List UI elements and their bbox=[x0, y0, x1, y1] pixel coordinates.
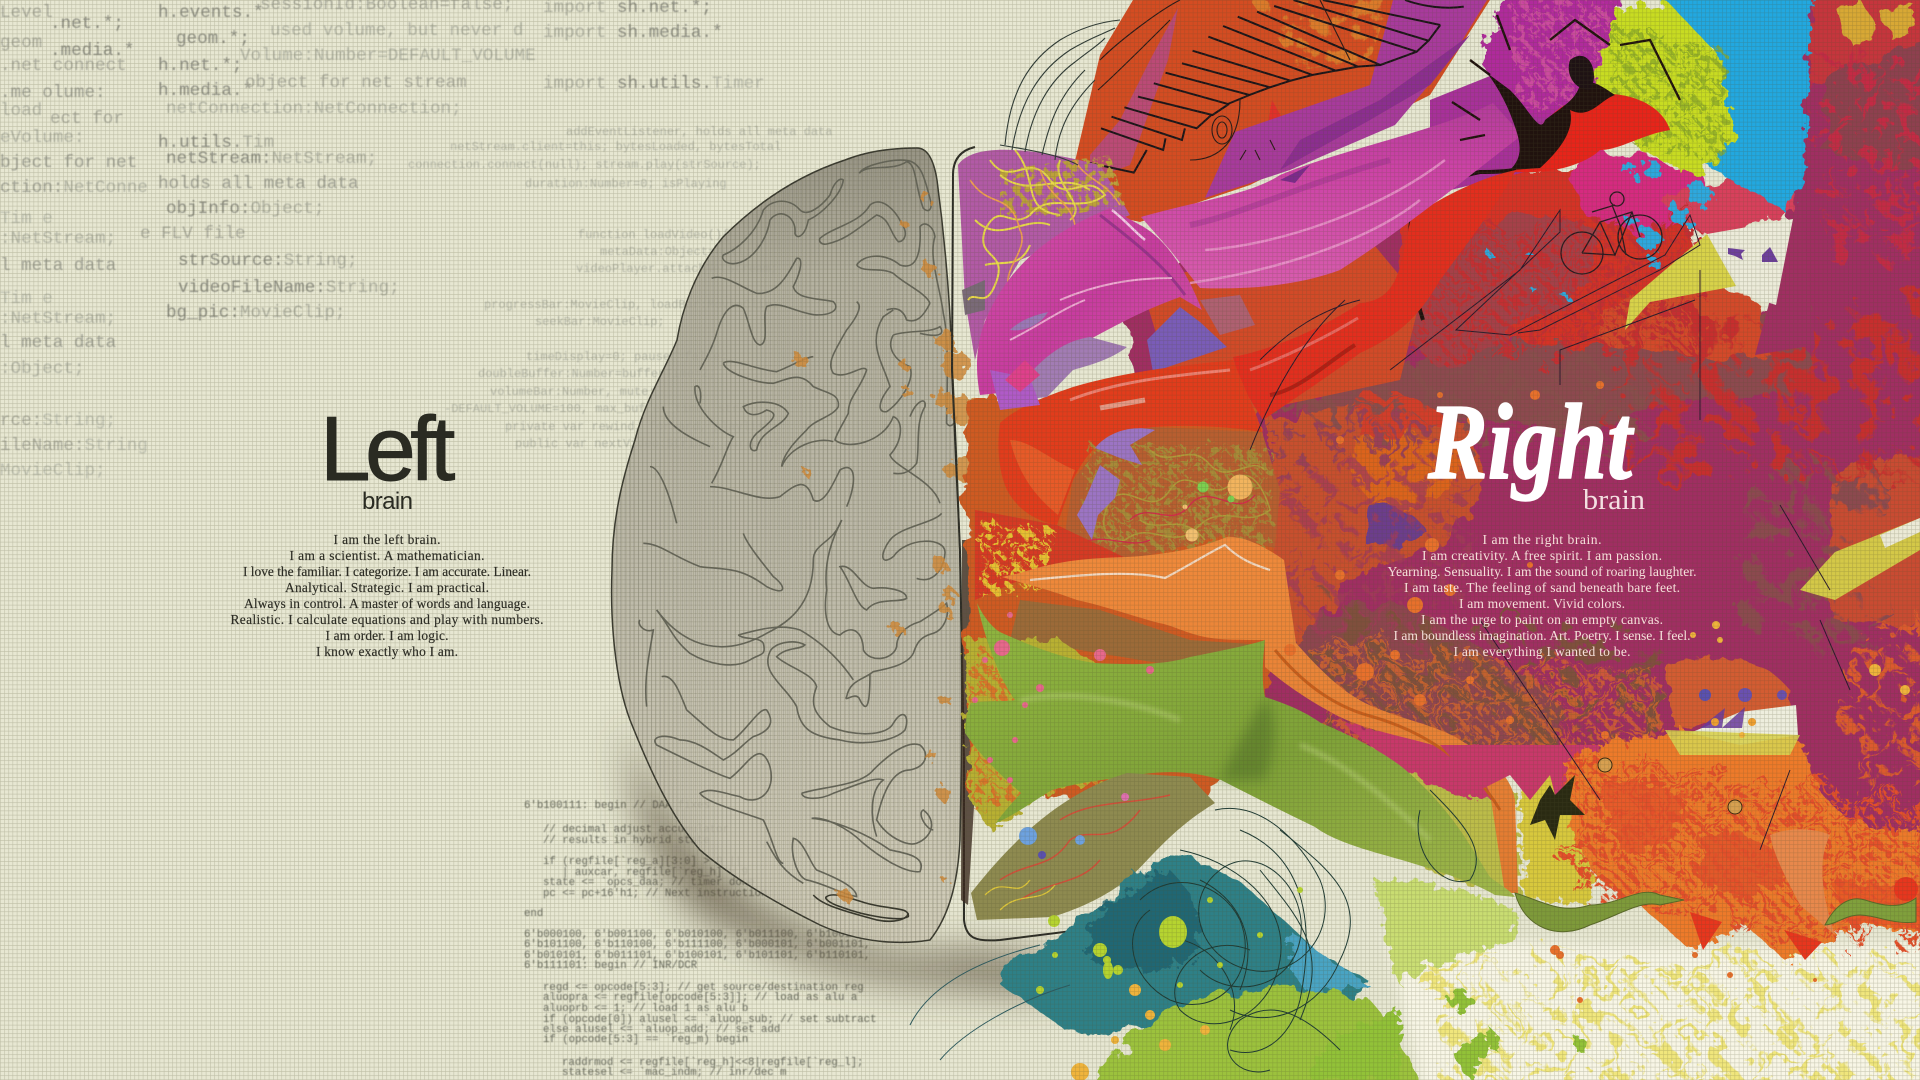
teal paint splash bbox=[996, 853, 1371, 1032]
faint code behind the brain: function loadVideo(){ bbox=[578, 228, 729, 242]
dark hemisphere edge band bbox=[961, 540, 975, 905]
faint code behind the brain: volumeBar:Number, mute; bbox=[490, 385, 656, 399]
yellow strip beside orange stream bbox=[1520, 770, 1600, 905]
yellow spatter lower right bbox=[1430, 950, 1920, 1080]
lime green bottom splash bbox=[1080, 989, 1425, 1080]
faint code behind the brain: videoPlayer.attachNetStream; bbox=[576, 262, 778, 276]
small paint ribbon in orange bbox=[1770, 829, 1835, 935]
orange paint spatter on brain edge bbox=[793, 192, 981, 901]
fan red cone bbox=[1260, 100, 1300, 170]
splatter: red on the crimson right bbox=[1620, 300, 1920, 480]
teal-grey fleck behind ribbon bbox=[1200, 295, 1255, 335]
computer code background: top left: bject for net bbox=[0, 153, 137, 173]
computer code background: top left: h.utils.Tim bbox=[158, 133, 274, 153]
text block: left brain description: Analytical. Strategic. I am practical. bbox=[285, 580, 489, 595]
right brain hemisphere outline bbox=[952, 147, 1080, 940]
text block: right brain description: I am movement. Vivid colors. bbox=[1459, 596, 1625, 611]
computer code background: top left: .me olume: bbox=[0, 83, 106, 103]
computer code background: top left: l meta data bbox=[0, 333, 116, 353]
lavender petals bbox=[1077, 428, 1155, 540]
computer code background: top left: e FLV file bbox=[140, 224, 246, 244]
pink red stripe beside white triangle bbox=[1660, 175, 1800, 238]
computer code background: top left: ction:NetConne bbox=[0, 178, 148, 198]
pink left ribbon bulge bbox=[977, 208, 1202, 395]
tree roots black drawing bbox=[1452, 15, 1680, 172]
olive-orange tangle bbox=[1060, 427, 1280, 565]
computer code background: top left: strSource:String; bbox=[178, 251, 358, 271]
heading: Right brain: Right bbox=[1427, 383, 1634, 502]
fan purple band bbox=[1205, 0, 1487, 198]
text block: left brain description: Always in control. A master of words and language. bbox=[244, 596, 530, 611]
paint splatter dots: yellow-orange bbox=[1071, 621, 1910, 1080]
green leaf splashes lower bbox=[1310, 989, 1587, 1080]
computer code background: top left: :NetStream; bbox=[0, 309, 116, 329]
brown band bbox=[1290, 300, 1810, 430]
faint code behind the brain: public var nextVideo:String, currentFrame bbox=[515, 437, 810, 451]
computer code background: top left: :NetStream; bbox=[0, 229, 116, 249]
left brain hemisphere bbox=[612, 148, 962, 942]
yellow strip and dot row lower right bbox=[1665, 688, 1800, 755]
text block: right brain description: I am the urge to paint on an empty canvas. bbox=[1421, 612, 1663, 627]
paint splatter dots: lime and yellow bbox=[1036, 887, 1303, 994]
blue paint splash bbox=[1655, 0, 1812, 208]
splatter: crimson on left orange bbox=[1270, 420, 1470, 640]
splatter: brown around title bbox=[1270, 350, 1640, 470]
brain folds: upper lobe bbox=[650, 160, 957, 523]
computer code background: top left: object for net stream bbox=[245, 73, 467, 93]
computer code background: bottom: if (opcode[5:3] == `reg_m) begin bbox=[543, 1033, 748, 1046]
red-yellow tangle left bbox=[975, 510, 1130, 600]
text block: left brain description: I know exactly who I am. bbox=[316, 644, 458, 659]
text block: right brain description: I am everything I wanted to be. bbox=[1454, 644, 1630, 659]
computer code background: top left: eVolume: bbox=[0, 128, 84, 148]
paint splatter dots: orange and red bbox=[1284, 381, 1843, 1003]
white canvas triangle with purple marks bbox=[1707, 219, 1793, 305]
paint splatter dots: pink and green on hemisphere edge bbox=[972, 612, 1154, 783]
computer code background: top left: l meta data bbox=[0, 256, 116, 276]
computer code background: bottom: end bbox=[524, 908, 543, 920]
splatter: orange lower center bbox=[1320, 640, 1660, 770]
computer code background: top left: geom bbox=[0, 33, 42, 53]
computer code background: top left: objInfo:Object; bbox=[166, 199, 324, 219]
sketch lines across red zone bbox=[1250, 210, 1850, 850]
text block: left brain description: Realistic. I calculate equations and play with numbers. bbox=[230, 612, 544, 627]
text block: right brain description: I am boundless imagination. Art. Poetry. I sense. I feel. bbox=[1394, 628, 1690, 643]
computer code background: top left: :Object; bbox=[0, 359, 84, 379]
top right red corner bbox=[1805, 0, 1920, 90]
right orange block bbox=[1825, 458, 1920, 623]
olive wave left bbox=[1515, 892, 1684, 932]
top right brown patch bbox=[1825, 30, 1920, 167]
pink main ribbon bbox=[1141, 103, 1522, 288]
computer code background: top left: h.media.* bbox=[158, 81, 253, 101]
computer code background: top left: geom.*; bbox=[176, 29, 250, 49]
red-orange central swirl bbox=[998, 360, 1262, 525]
computer code background: top left: h.events.* bbox=[158, 3, 264, 23]
dark sketch scribbles near teal bbox=[910, 790, 1476, 1072]
yellow-green splash bbox=[1587, 3, 1736, 177]
faint code behind the brain: private var rewind, forward, playlist bbox=[505, 420, 771, 434]
orange speckle on green base bbox=[970, 650, 1125, 810]
fan sketch lines and eye bbox=[1098, 0, 1350, 260]
green paint blob bbox=[965, 603, 1515, 897]
faint code behind the brain: progressBar:MovieClip, loadBar:MovieClip; bbox=[484, 298, 779, 312]
lower middle brown crimson bbox=[1290, 604, 1570, 754]
hemisphere top tangle bbox=[958, 150, 1130, 360]
splatter: red on far right top bbox=[1810, 60, 1920, 260]
red-orange behind ribbons bbox=[1140, 240, 1420, 410]
computer code background: bottom: 6'b111101: begin // INR/DCR bbox=[524, 960, 698, 972]
computer code background: bottom: // decimal adjust accumulator bbox=[543, 824, 729, 836]
computer code background: bottom bbox=[524, 800, 877, 1079]
computer code background: top left: load bbox=[0, 101, 42, 121]
little wheels on orange bbox=[1598, 758, 1742, 814]
computer code background: top left: import sh.utils.Timer bbox=[543, 74, 765, 94]
text block: right brain description: I am creativity. A free spirit. I am passion. bbox=[1422, 548, 1662, 563]
computer code background: bottom: 6'b010101, 6'b011101, 6'b100101, 6'b101101, 6'b110101, bbox=[524, 950, 870, 962]
right side yellow stripe bbox=[1800, 518, 1920, 600]
computer code background: bottom: // results in hybrid state bbox=[543, 835, 710, 847]
splatter: red center zone bbox=[1420, 210, 1700, 360]
upper yellow triangle bbox=[1625, 234, 1736, 330]
faint code behind the brain: -DEFAULT_VOLUME=100, max_buffer_time, stream bbox=[444, 402, 761, 416]
pink speckle on magenta bbox=[1510, 0, 1615, 110]
computer code background: bottom: 6'b101100, 6'b110100, 6'b111100, 6'b000101, 6'b001101, bbox=[524, 939, 870, 951]
heading: Left brain: brain bbox=[362, 488, 412, 515]
crimson drips above the yellow bbox=[1440, 745, 1600, 820]
crimson mass bbox=[1120, 0, 1920, 890]
green speckled base bbox=[965, 640, 1130, 830]
faint code behind the brain: connection.connect(null); stream.play(strSource); bbox=[408, 158, 761, 172]
ladder drawing in fan bbox=[1088, 0, 1464, 173]
computer code background: top left: netStream:NetStream; bbox=[166, 149, 377, 169]
computer code background: top left: netConnection:NetConnection; bbox=[166, 99, 462, 119]
computer code background: bottom: else alusel <= `aluop_add; // set add bbox=[543, 1023, 780, 1036]
purple streak behind ribbon bbox=[1147, 307, 1227, 372]
computer code background: bottom: if (opcode[0]) alusel <= `aluop_sub; // set subtract bbox=[543, 1013, 877, 1026]
text block: right brain description bbox=[1388, 532, 1696, 659]
magenta textured patch bbox=[1480, 0, 1630, 125]
faint code behind the brain: netStream.client=this; bytesLoaded, bytesTotal bbox=[450, 140, 781, 154]
splatter: brown on right bbox=[1740, 470, 1880, 650]
splatter: brown lower center bbox=[1320, 600, 1660, 750]
bright orange bbox=[1354, 433, 1462, 510]
magenta under yellow bbox=[1570, 145, 1720, 232]
fan orange-yellow streaks bbox=[1250, 0, 1390, 70]
purple-grey paint chunk bbox=[990, 337, 1127, 410]
text block: right brain description: I am taste. The feeling of sand beneath bare feet. bbox=[1404, 580, 1680, 595]
dark tree trunk line bbox=[1410, 160, 1540, 320]
bright cream lower right wash bbox=[1385, 930, 1920, 1080]
computer code background: top left: Level bbox=[0, 3, 53, 23]
computer code background: top left: holds all meta data bbox=[158, 174, 359, 194]
text block: right brain description: Yearning. Sensuality. I am the sound of roaring laughter. bbox=[1388, 564, 1696, 579]
lower middle orange patch bbox=[1667, 657, 1790, 730]
right brain paint base masses bbox=[1120, 0, 1920, 890]
computer code background: bottom: | auxcar, regfile[`reg_h] > 9 bbox=[562, 866, 748, 879]
computer code background: bottom: regd <= opcode[5:3]; // get source/destination reg bbox=[543, 982, 864, 994]
right side white flecks bbox=[1880, 518, 1920, 548]
left orange base bbox=[1270, 406, 1480, 649]
top right yellow flecks bbox=[1835, 0, 1915, 45]
muted brown wedge bbox=[1400, 210, 1600, 370]
computer code background: bottom: aluoprb <= 1; // load 1 as alu b bbox=[543, 1003, 748, 1015]
purple fleck near text bbox=[1362, 506, 1425, 547]
top orange-red fan bbox=[1062, 0, 1490, 222]
computer code background: bottom: raddrmod <= regfile[`reg_h]<<8|regfile[`reg_l]; bbox=[562, 1056, 863, 1069]
pink drips and lime under green bbox=[1345, 725, 1520, 895]
blue tint on teal bbox=[1290, 930, 1370, 995]
faint code behind the brain: seekBar:MovieClip; bbox=[535, 315, 665, 329]
crimson behind white triangle bbox=[1755, 190, 1815, 355]
lime wash near tail bbox=[1375, 880, 1516, 985]
dark speckle on yellow-green bbox=[1610, 20, 1725, 165]
computer code background: bottom: aluopra <= regfile[opcode[5:3]]; // load as alu a bbox=[543, 992, 858, 1004]
red wedges on orange drips bbox=[1690, 877, 1918, 960]
brain folds: lower lobe bbox=[639, 513, 947, 921]
bicycle sketch bbox=[1561, 192, 1662, 274]
fan purple dark shade bbox=[1280, 35, 1470, 170]
computer code background: bottom: state <= `opcs_daa; // timer done bbox=[543, 876, 755, 889]
computer code background: top left: videoFileName:String; bbox=[178, 278, 400, 298]
computer code background: bottom: 6'b000100, 6'b001100, 6'b010100, 6'b011100, 6'b100100, bbox=[524, 929, 870, 941]
orange red under yellow bbox=[1600, 288, 1770, 359]
blue spots bbox=[1487, 161, 1712, 299]
brain drop shadow bbox=[628, 720, 1064, 991]
brown speckle under orange band bbox=[1010, 600, 1265, 670]
text block: left brain description: I am order. I am logic. bbox=[326, 628, 448, 643]
red splash near title bbox=[1355, 392, 1450, 438]
computer code background: top left: used volume, but never d bbox=[270, 21, 523, 41]
white and purple triangles right bbox=[1690, 705, 1798, 745]
computer code background: top left: import sh.media.* bbox=[543, 23, 722, 43]
backing behind tree bbox=[1430, 60, 1565, 195]
computer code background: top left: ileName:String bbox=[0, 436, 148, 456]
faint code behind the brain: metaData:Object=null; bbox=[600, 245, 751, 259]
computer code background: bottom: if (regfile[`reg_a][3:0] > 9 || bbox=[543, 855, 742, 868]
faint code behind the brain: timeDisplay=0; paused=false; bbox=[526, 350, 728, 364]
computer code background: top left: h.net.*; bbox=[158, 56, 242, 76]
dark teal core bbox=[1090, 870, 1200, 972]
text block: left brain description: I love the familiar. I categorize. I am accurate. Linear. bbox=[243, 564, 531, 579]
computer code background: top left: ect for bbox=[50, 109, 124, 129]
faint code behind the brain bbox=[408, 125, 832, 451]
faint code behind the brain: doubleBuffer:Number=bufferTime=2; bbox=[478, 367, 716, 381]
computer code background: top left: .net connect bbox=[0, 56, 127, 76]
text block: left brain description: I am a scientist. A mathematician. bbox=[290, 548, 484, 563]
computer code background: top left: rce:String; bbox=[0, 411, 116, 431]
orange splash bbox=[1565, 726, 1920, 960]
red paint ribbon upper bbox=[1233, 170, 1516, 420]
computer code background: top left: Tim e bbox=[0, 289, 53, 309]
paint droplets in tangle bbox=[1182, 474, 1252, 542]
orange paint band and stream bbox=[1002, 537, 1518, 893]
multicolour patchwork leaf bbox=[971, 773, 1215, 920]
faint code behind the brain: addEventListener, holds all meta data bbox=[566, 125, 832, 139]
heading: Right brain: brain bbox=[1583, 484, 1646, 516]
text block: left brain description: I am the left brain. bbox=[334, 532, 440, 547]
computer code background: bottom: pc <= pc+16'h1; // Next instruction bbox=[543, 888, 767, 900]
computer code background: bottom: 6'b100111: begin // DAA fixes bbox=[524, 800, 710, 812]
splatter: orange lower right bbox=[1840, 620, 1920, 790]
olive wave right bbox=[1825, 898, 1916, 925]
fan pink side stripe bbox=[1090, 8, 1178, 180]
computer code background: top left: .net.*; bbox=[50, 14, 124, 34]
computer code background: top left: Volume:Number=DEFAULT_VOLUME bbox=[240, 46, 536, 66]
computer code background: bottom: statesel <= `mac_indm; // inr/dec m bbox=[562, 1066, 786, 1079]
computer code background: top left bbox=[0, 0, 765, 481]
faint code behind the brain: duration:Number=0; isPlaying bbox=[525, 177, 727, 191]
red zone under blue bbox=[1400, 170, 1700, 350]
computer code background: top left: MovieClip; bbox=[0, 461, 106, 481]
computer code background: top left: bg_pic:MovieClip; bbox=[166, 303, 346, 323]
base paint under central swirl bbox=[965, 400, 1285, 800]
computer code background: top left: .media.* bbox=[50, 41, 134, 61]
black spiky sketch in yellow bbox=[1530, 775, 1585, 840]
text block: left brain description bbox=[230, 532, 544, 659]
computer code background: top left: Tim e bbox=[0, 209, 53, 229]
scribble lines above the hemisphere bbox=[1000, 20, 1120, 165]
heading: Left brain: Left bbox=[320, 399, 455, 500]
text block: right brain description: I am the right brain. bbox=[1482, 532, 1602, 547]
orange splash mottling bbox=[1570, 750, 1920, 945]
